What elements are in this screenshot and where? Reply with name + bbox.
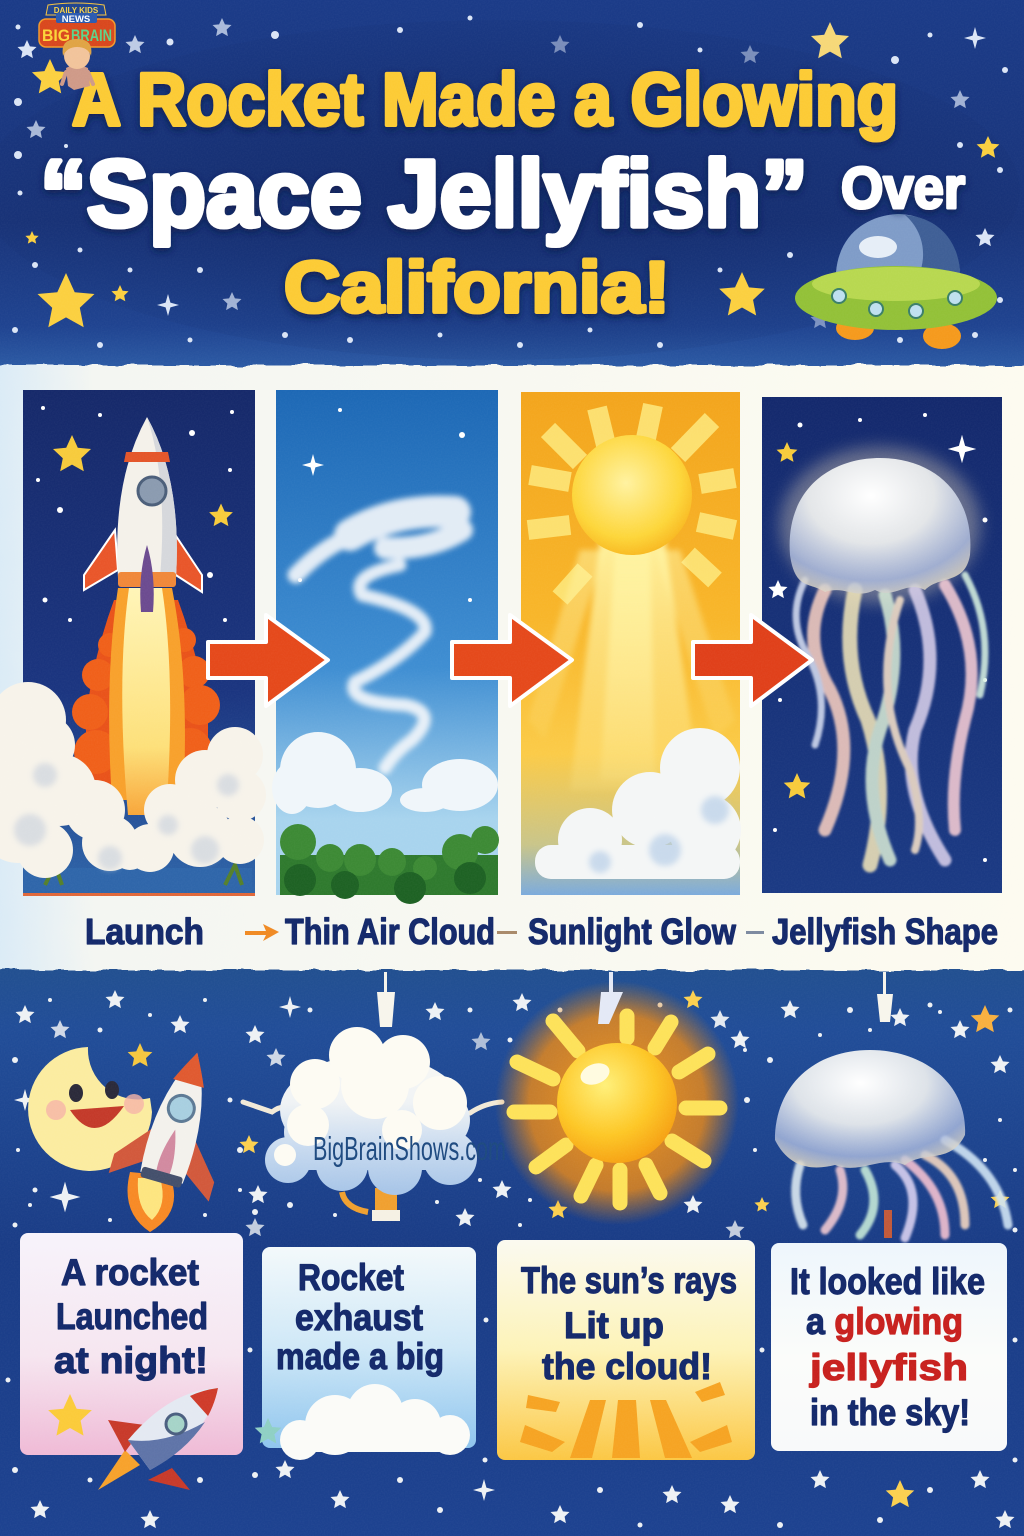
cloud illustration: [255, 1384, 470, 1460]
divider dash: [746, 931, 764, 934]
arrow 1: [208, 615, 328, 706]
card text: in the sky!: [810, 1392, 970, 1433]
card text: exhaust: [295, 1297, 423, 1338]
stars: lower yellow: [128, 990, 1009, 1507]
card text: [521, 1260, 737, 1387]
moon: [28, 1047, 152, 1171]
clouds in sun panel: [535, 728, 741, 879]
ray illustration: [520, 1382, 732, 1458]
stars: top yellow: [25, 22, 999, 327]
title line 1: A Rocket Made a Glowing: [72, 58, 898, 141]
arrow 3: [693, 615, 812, 706]
small rocket icon: [98, 1388, 218, 1490]
tab 1: [377, 972, 395, 1027]
card text: a glowing: [806, 1301, 963, 1342]
jellyfish bell: [790, 458, 970, 594]
card text: The sun’s rays: [521, 1260, 737, 1301]
light beam: [528, 540, 735, 790]
sun rays: [514, 1016, 720, 1203]
card text: [276, 1257, 444, 1377]
card text: Launched: [56, 1296, 208, 1337]
paper band: [0, 365, 1024, 970]
jellyfish tentacles: [796, 575, 985, 865]
title line 3: California!: [284, 248, 670, 328]
card text: [790, 1261, 985, 1433]
card text: the cloud!: [542, 1346, 712, 1387]
title word: Over: Over: [841, 156, 965, 221]
card text: A rocket: [61, 1252, 199, 1293]
label: Sunlight Glow: Sunlight Glow: [528, 911, 737, 952]
tentacles: [796, 1140, 1008, 1238]
panel: jellyfish shape: [762, 397, 1002, 893]
logo: Daily Kids News Big Brain: BRAIN: [71, 26, 112, 45]
wispy exhaust cloud: [296, 511, 462, 768]
logo: Daily Kids News Big Brain: DAILY KIDS: [54, 6, 99, 15]
icon: boy mascot: [62, 39, 93, 90]
sun disc: [572, 435, 692, 555]
panel labels: [85, 911, 998, 952]
rocket flame: [72, 588, 220, 815]
panel: launch: [0, 390, 266, 896]
stem: [884, 1210, 892, 1238]
title line 2: “Space Jellyfish”: [40, 141, 808, 247]
card: looked like jellyfish: [771, 1243, 1007, 1451]
logo: Daily Kids News Big Brain: NEWS: [62, 14, 90, 25]
tab 2: [598, 972, 623, 1024]
card text: Lit up: [564, 1305, 664, 1346]
card text: made a big: [276, 1336, 444, 1377]
logo: Daily Kids News Big Brain: BIG: [42, 26, 70, 45]
illustration: jellyfish: [775, 1050, 1008, 1238]
label: Thin Air Cloud: Thin Air Cloud: [285, 911, 495, 952]
cloud body: [265, 1027, 477, 1195]
arrow: orange label arrow: [245, 924, 279, 941]
icon: UFO: [795, 214, 997, 349]
logo: Daily Kids News Big Brain: [39, 3, 115, 47]
card text: It looked like: [790, 1261, 985, 1302]
star: [48, 1394, 92, 1436]
cloud stand: [342, 1188, 400, 1221]
watermark: BigBrainShows.com: [313, 1130, 506, 1167]
flame under rocket: [128, 1172, 174, 1232]
small rocket: [109, 1038, 247, 1202]
label: Launch: Launch: [85, 911, 204, 952]
illustration: cloud: [243, 1027, 502, 1221]
illustration: moon and rocket: [28, 1038, 247, 1232]
card: rocket launched at night: [20, 1233, 243, 1490]
illustration: sun: [495, 981, 739, 1225]
stars: lower sky: [6, 990, 1018, 1528]
connector tabs: [377, 972, 893, 1027]
panel: thin air cloud: [272, 390, 499, 904]
launch smoke cloud: [0, 682, 266, 892]
rocket: [84, 417, 202, 612]
sun rays: [528, 405, 735, 598]
stars in sky panel: [298, 408, 472, 602]
tab 3: [877, 972, 893, 1022]
title: [40, 58, 965, 328]
treeline: [280, 824, 499, 904]
sun disc: [557, 1043, 677, 1163]
card text: Rocket: [298, 1257, 404, 1298]
cloud tails: [243, 1102, 502, 1113]
low clouds: [272, 732, 498, 814]
card text: [54, 1252, 208, 1381]
arrows: [208, 615, 812, 706]
card text: jellyfish: [809, 1347, 968, 1388]
card text: at night!: [54, 1340, 208, 1381]
card: sun's rays: [497, 1240, 755, 1460]
arrow 2: [452, 615, 572, 706]
card: rocket exhaust: [255, 1247, 476, 1460]
divider dash: [497, 931, 517, 934]
stars in jellyfish panel: [768, 413, 988, 862]
stars: top sky: [12, 16, 1008, 348]
stars in launch panel: [36, 406, 234, 622]
sun glow: [495, 981, 739, 1225]
bell: [775, 1050, 965, 1168]
bell glow: [780, 447, 980, 603]
panel: sunlight glow: [521, 392, 741, 895]
